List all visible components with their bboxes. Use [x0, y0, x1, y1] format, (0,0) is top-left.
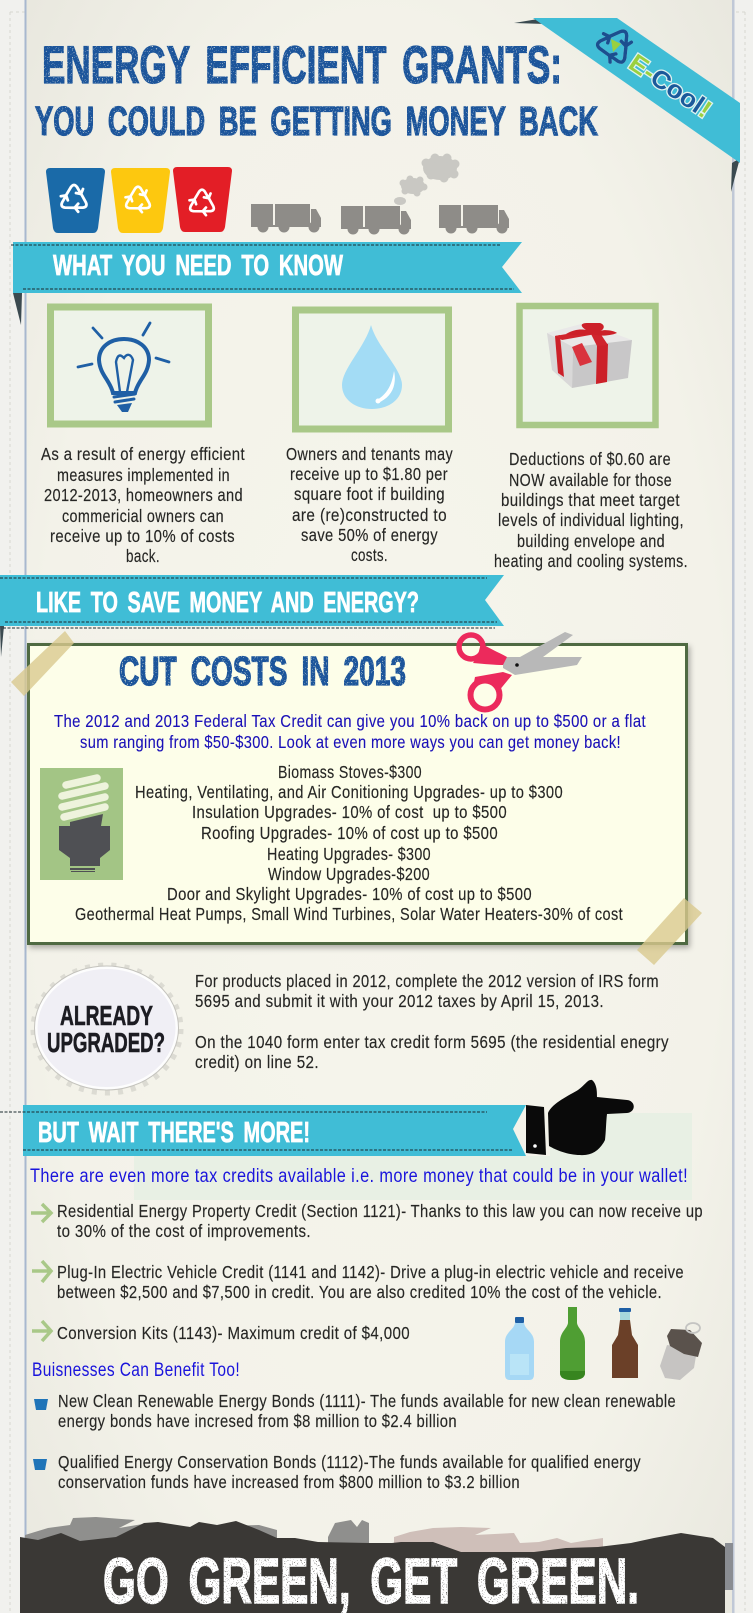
- item: plug-in electric vehicle credit: between $2,500 and $7,500 in credit. You are also credited 10% the cost of the vehicle.: [57, 1282, 662, 1302]
- text: list of upgrades: Roofing Upgrades- 10% of cost up to $500: [201, 823, 498, 843]
- heading: businesses can benefit too: Buisnesses Can Benefit Too!: [32, 1360, 240, 1381]
- item: plug-in electric vehicle credit: [57, 1262, 684, 1302]
- panel: owners and tenants: [286, 310, 453, 565]
- text: owners and tenants: costs.: [351, 545, 388, 565]
- icon: recycling logo: [587, 20, 642, 73]
- text: deductions: building envelope and: [517, 531, 665, 551]
- text: deductions: heating and cooling systems.: [494, 551, 688, 571]
- text: list of upgrades: Heating Upgrades- $300: [267, 844, 431, 864]
- icon: bucket bullet 2: [33, 1459, 47, 1470]
- text: owners and tenants: are (re)constructed to: [292, 505, 447, 525]
- text: list of upgrades: Insulation Upgrades- 10% of cost up to $500: [192, 802, 507, 822]
- icon: bucket bullet 1: [34, 1399, 48, 1410]
- icon: light bulb: [50, 307, 208, 424]
- text: energy measures: 2012-2013, homeowners and: [44, 485, 243, 505]
- icon: arrow 1: [31, 1204, 51, 1222]
- banner: but wait there's more: [0, 1105, 526, 1156]
- text: list of upgrades: Window Upgrades-$200: [268, 864, 430, 884]
- icon: crushed can: [660, 1323, 702, 1380]
- banner: but wait there's more: BUT WAIT THERE'S MORE!: [38, 1117, 310, 1149]
- icon: arrow 3: [32, 1321, 51, 1341]
- icon: recycling bins: [46, 167, 232, 233]
- ribbon: E-Cool logo: [514, 18, 740, 192]
- icon: gift box: [520, 306, 656, 425]
- badge: already upgraded: [34, 966, 180, 1092]
- icon: green bottle: [560, 1307, 585, 1380]
- icon: smoke clouds: [394, 154, 460, 205]
- banner: what you need to know: WHAT YOU NEED TO KNOW: [53, 250, 343, 282]
- item: energy conservation bonds: Qualified Energy Conservation Bonds (1112)-The funds available for qualified energy: [58, 1452, 641, 1472]
- panel: deductions: [494, 306, 688, 571]
- text: owners and tenants: save 50% of energy: [301, 525, 438, 545]
- tape top left: [11, 631, 74, 696]
- text: IRS form instructions: For products placed in 2012, complete the 2012 version of IRS form: [195, 971, 659, 991]
- text: energy measures: [41, 444, 245, 566]
- item: residential energy property credit: to 30% of the cost of improvements.: [57, 1221, 311, 1241]
- text: owners and tenants: [286, 444, 453, 565]
- text: IRS form instructions: On the 1040 form enter tax credit form 5695 (the residential enegry: [195, 1032, 669, 1052]
- icon: water drop: [296, 310, 448, 429]
- footer: go green, get green: [20, 1517, 733, 1613]
- icon: arrow 2: [32, 1261, 51, 1282]
- icon: brown bottle: [612, 1308, 638, 1378]
- banner: like to save money and energy: [0, 575, 504, 657]
- text: IRS form instructions: [195, 971, 669, 1072]
- badge: already upgraded: UPGRADED?: [47, 1027, 165, 1058]
- text: IRS form instructions: 5695 and submit it with your 2012 taxes by April 15, 2013.: [195, 991, 604, 1011]
- list: business bonds: [33, 1391, 676, 1492]
- text: energy measures: commericial owners can: [62, 506, 224, 526]
- text: list of upgrades: Biomass Stoves-$300: [278, 762, 422, 782]
- icon: pointing hand: [526, 1080, 634, 1155]
- text: list of upgrades: [75, 762, 623, 924]
- item: clean renewable energy bonds: [58, 1391, 676, 1431]
- item: conversion kits: Conversion Kits (1143)- Maximum credit of $4,000: [57, 1323, 410, 1343]
- icon: water bottle: [505, 1317, 534, 1380]
- text: list of upgrades: Door and Skylight Upgrades- 10% of cost up to $500: [167, 884, 532, 904]
- icon: CFL bulb: [40, 768, 123, 880]
- text: energy measures: measures implemented in: [57, 465, 230, 485]
- heading: cut costs: CUT COSTS IN 2013: [119, 648, 406, 694]
- text: owners and tenants: Owners and tenants may: [286, 444, 453, 464]
- text: owners and tenants: square foot if building: [294, 484, 445, 504]
- icon: scissors: [459, 632, 582, 710]
- tape bottom right: [637, 898, 702, 965]
- item: residential energy property credit: [57, 1201, 703, 1241]
- text: federal tax credit: sum ranging from $50-$300. Look at even more ways you can get money back!: [80, 732, 621, 752]
- text: list of upgrades: Geothermal Heat Pumps, Small Wind Turbines, Solar Water Heaters-30% of cost: [75, 904, 623, 924]
- text: federal tax credit: The 2012 and 2013 Federal Tax Credit can give you 10% back on up to $500 or a flat: [54, 711, 646, 731]
- icon: bottles and can: [505, 1307, 702, 1380]
- icon: trucks: [251, 204, 509, 234]
- text: deductions: buildings that meet target: [501, 490, 680, 510]
- item: energy conservation bonds: [58, 1452, 641, 1492]
- text: deductions: levels of individual lighting,: [498, 510, 684, 530]
- panel: energy measures: [41, 307, 245, 566]
- text: energy measures: As a result of energy efficient: [41, 444, 245, 464]
- text: owners and tenants: receive up to $1.80 per: [290, 464, 448, 484]
- text: list of upgrades: Heating, Ventilating, and Air Conitioning Upgrades- up to $300: [135, 782, 563, 802]
- pale backdrop: [134, 1113, 692, 1200]
- text: energy measures: receive up to 10% of costs: [50, 526, 235, 546]
- panel: cut costs in 2013: [11, 631, 702, 965]
- item: clean renewable energy bonds: energy bonds have incresed from $8 million to $2.4 billion: [58, 1411, 457, 1431]
- text: deductions: Deductions of $0.60 are: [509, 449, 671, 469]
- title: [35, 36, 598, 144]
- text: deductions: [494, 449, 688, 571]
- text: federal tax credit: [54, 711, 646, 752]
- item: energy conservation bonds: conservation funds have increased from $800 million to $3.2 billion: [58, 1472, 520, 1492]
- text: IRS form instructions: credit) on line 52.: [195, 1052, 319, 1072]
- logo name: E-Cool!: [624, 49, 716, 124]
- list: tax credits: [31, 1201, 703, 1343]
- banner: what you need to know: [11, 242, 522, 325]
- text: deductions: NOW available for those: [509, 470, 672, 490]
- banner: like to save money and energy: LIKE TO SAVE MONEY AND ENERGY?: [36, 587, 419, 619]
- text: energy measures: back.: [126, 546, 160, 566]
- badge: already upgraded: ALREADY: [60, 1000, 153, 1031]
